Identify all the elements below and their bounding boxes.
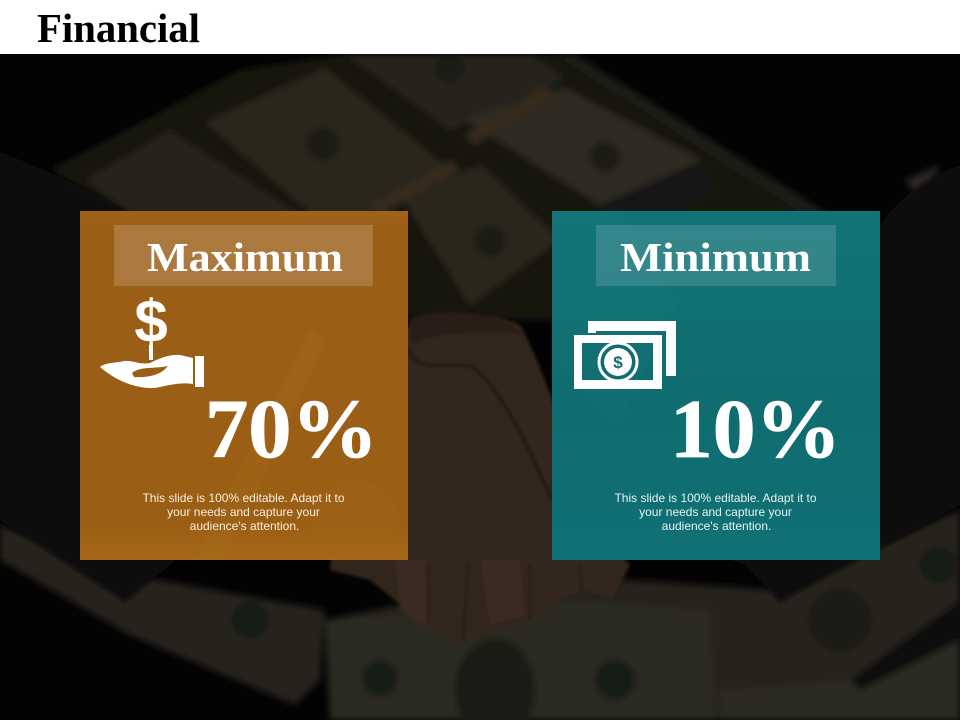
suit sleeves bbox=[0, 152, 960, 602]
description: This slide is 100% editable. Adapt it to bbox=[614, 491, 817, 505]
description: your needs and capture your bbox=[639, 505, 792, 519]
description: This slide is 100% editable. Adapt it to bbox=[142, 491, 345, 505]
icon: banknotes bbox=[574, 321, 676, 389]
clasped hands bbox=[330, 312, 630, 645]
description: audience's attention. bbox=[190, 519, 299, 533]
title bar bbox=[0, 0, 960, 54]
heading box: Maximum bbox=[147, 234, 343, 280]
description bbox=[614, 491, 817, 533]
heading box bbox=[114, 225, 373, 286]
description: audience's attention. bbox=[662, 519, 771, 533]
description: your needs and capture your bbox=[167, 505, 320, 519]
panel: maximum bbox=[80, 211, 408, 560]
money stacks, top bbox=[50, 53, 940, 320]
heading box: Minimum bbox=[620, 234, 811, 280]
panel: minimum bbox=[552, 211, 880, 560]
icon: dollar in hand bbox=[100, 288, 204, 388]
heading box bbox=[596, 225, 836, 286]
icon: dollar in hand: $ bbox=[134, 288, 168, 355]
icon: banknotes: $ bbox=[613, 353, 623, 372]
title: Financial bbox=[37, 5, 200, 51]
description bbox=[142, 491, 345, 533]
value: 70%: 70% bbox=[205, 383, 378, 476]
bills, bottom bbox=[0, 510, 960, 720]
value: 10%: 10% bbox=[670, 383, 841, 476]
